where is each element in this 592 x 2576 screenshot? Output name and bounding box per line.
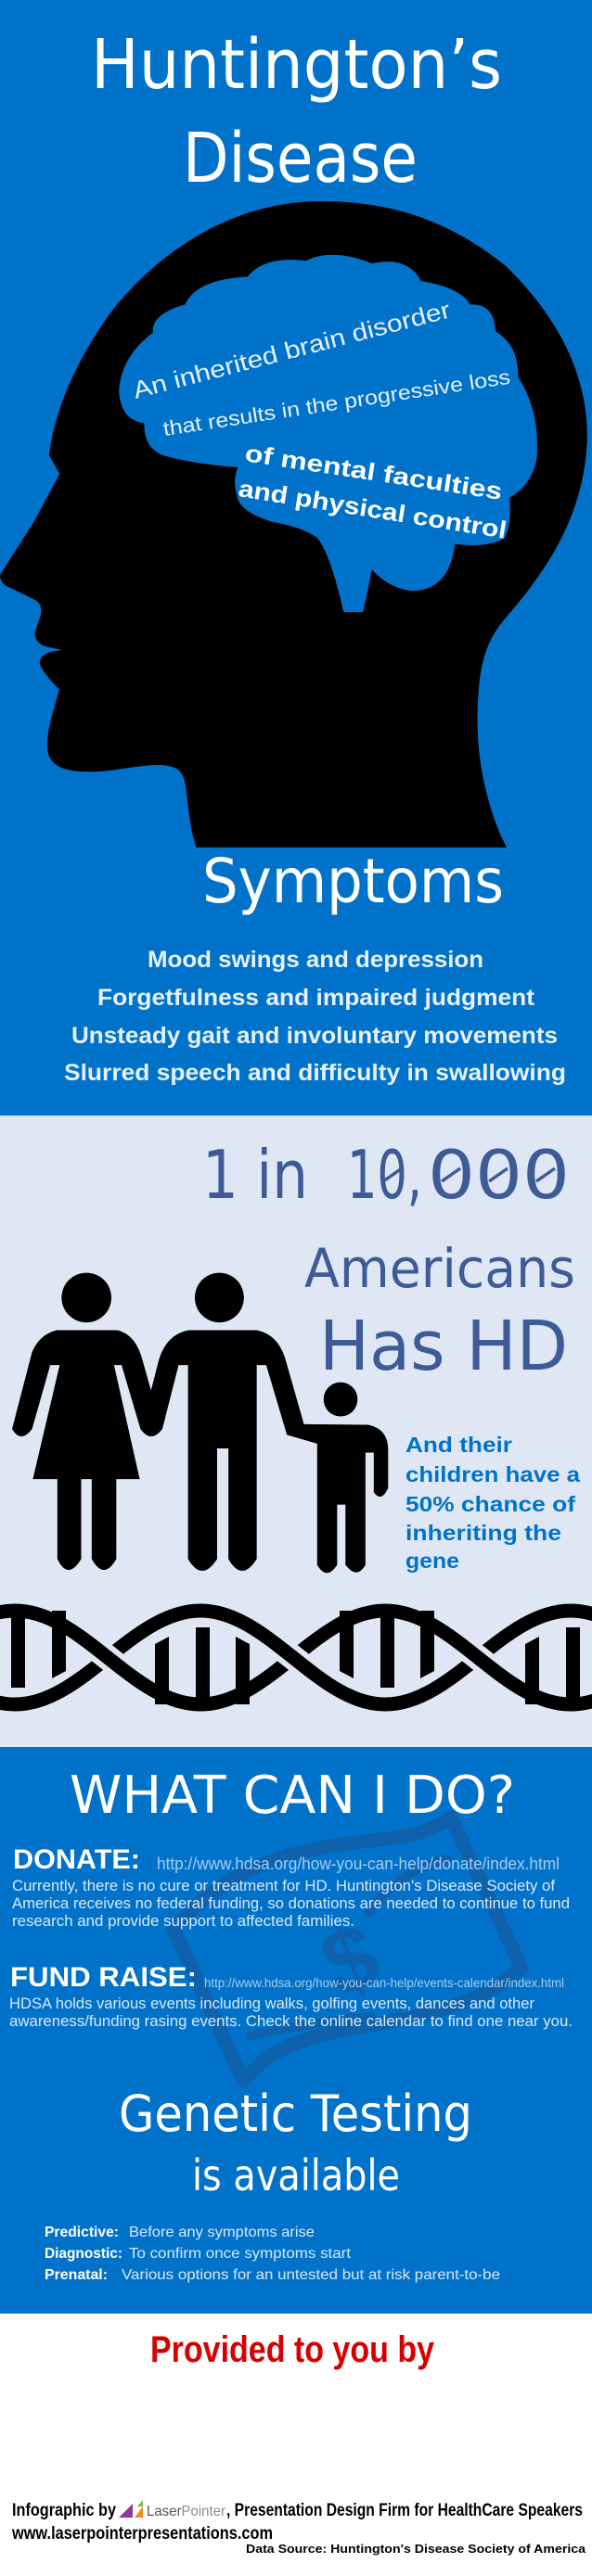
callout: children inherit (405, 1433, 580, 1573)
heading: genetic testing: Genetic Testing (119, 2085, 472, 2143)
list: symptoms: Slurred speech and difficulty in swallowing (64, 1060, 566, 1086)
list: symptoms (64, 947, 566, 1086)
footer: credits: www.laserpointerpresentations.com (11, 2524, 273, 2544)
section: donate (12, 1844, 570, 1930)
icon: family of three (12, 1273, 388, 1573)
heading: what can I do: WHAT CAN I DO? (70, 1766, 515, 1826)
list: testing types: Prenatal: (45, 2267, 108, 2283)
callout: children inherit: gene (405, 1549, 459, 1573)
logo wordmark: LaserPointer (147, 2504, 226, 2519)
section: fund raise: awareness/funding rasing events. Check the online calendar to find one near you. (9, 2012, 573, 2030)
title (91, 25, 502, 198)
list: testing types: Diagnostic: (45, 2246, 122, 2262)
panel: what can I do (0, 1747, 592, 2314)
list: symptoms: Unsteady gait and involuntary movements (71, 1023, 558, 1049)
statistic: 1 in 10,000 Americans has HD (202, 1136, 575, 1386)
heading: genetic testing: is available (192, 2150, 400, 2200)
text block: brain description (130, 296, 511, 544)
heading: symptoms: Symptoms (202, 846, 504, 917)
text block: brain description: that results in the progressive loss (161, 365, 511, 440)
statistic: 1 in 10,000 Americans has HD: Americans (304, 1237, 575, 1300)
list: testing types: Predictive: (45, 2225, 119, 2240)
title: Huntington’s (91, 25, 502, 105)
footer: credits: Data Source: Huntington's Disease Society of America (246, 2542, 586, 2556)
text block: brain description: and physical control (237, 474, 508, 544)
list: testing types: To confirm once symptoms start (129, 2246, 352, 2262)
text block: brain description: An inherited brain disorder (130, 296, 454, 404)
text block: brain description: of mental faculties (243, 439, 504, 505)
icon: head silhouette with brain (0, 201, 587, 848)
section: donate: research and provide support to affected families. (12, 1912, 354, 1930)
list: testing types (45, 2225, 500, 2283)
panel: prevalence (0, 1116, 592, 1747)
statistic: 1 in 10,000 Americans has HD: 1 in (202, 1136, 308, 1214)
heading: genetic testing (119, 2085, 472, 2200)
section: donate: DONATE: (13, 1844, 140, 1875)
list: testing types: Before any symptoms arise (129, 2225, 315, 2240)
section: fund raise: FUND RAISE: (10, 1962, 197, 1993)
icon: dollar bill watermark (174, 1817, 521, 2081)
statistic: 1 in 10,000 Americans has HD: Has HD (319, 1307, 568, 1386)
icon: DNA helix (0, 1611, 592, 1704)
callout: children inherit: And their (405, 1433, 512, 1457)
footer: credits (11, 2500, 586, 2556)
callout: children inherit: children have a (405, 1462, 580, 1486)
section: fund raise: http://www.hdsa.org/how-you-can-help/events-calendar/index.html (204, 1975, 564, 1990)
section: donate: Currently, there is no cure or treatment for HD. Huntington's Disease Society of (12, 1877, 555, 1894)
callout: children inherit: 50% chance of (405, 1492, 575, 1516)
footer: credits: Infographic by (12, 2501, 116, 2520)
list: symptoms: Mood swings and depression (148, 947, 483, 973)
section: donate: America receives no federal funding, so donations are needed to continue to fund (12, 1894, 570, 1912)
section: fund raise (9, 1962, 573, 2030)
statistic: 1 in 10,000 Americans has HD: 000 (428, 1136, 570, 1214)
list: testing types: Various options for an untested but at risk parent-to-be (122, 2267, 500, 2283)
section: fund raise: HDSA holds various events including walks, golfing events, dances and other (9, 1995, 534, 2012)
list: symptoms: Forgetfulness and impaired judgment (97, 985, 535, 1011)
title: Disease (183, 119, 418, 198)
panel: intro and symptoms (0, 0, 592, 1116)
icon: dollar bill watermark: $ (308, 1903, 393, 2018)
icon: LaserPointer logo (119, 2500, 143, 2518)
callout: children inherit: inheriting the (405, 1521, 561, 1545)
statistic: 1 in 10,000 Americans has HD: 10, (347, 1136, 422, 1214)
section: donate: http://www.hdsa.org/how-you-can-help/donate/index.html (157, 1855, 560, 1873)
heading: provided to you by: Provided to you by (150, 2329, 435, 2370)
